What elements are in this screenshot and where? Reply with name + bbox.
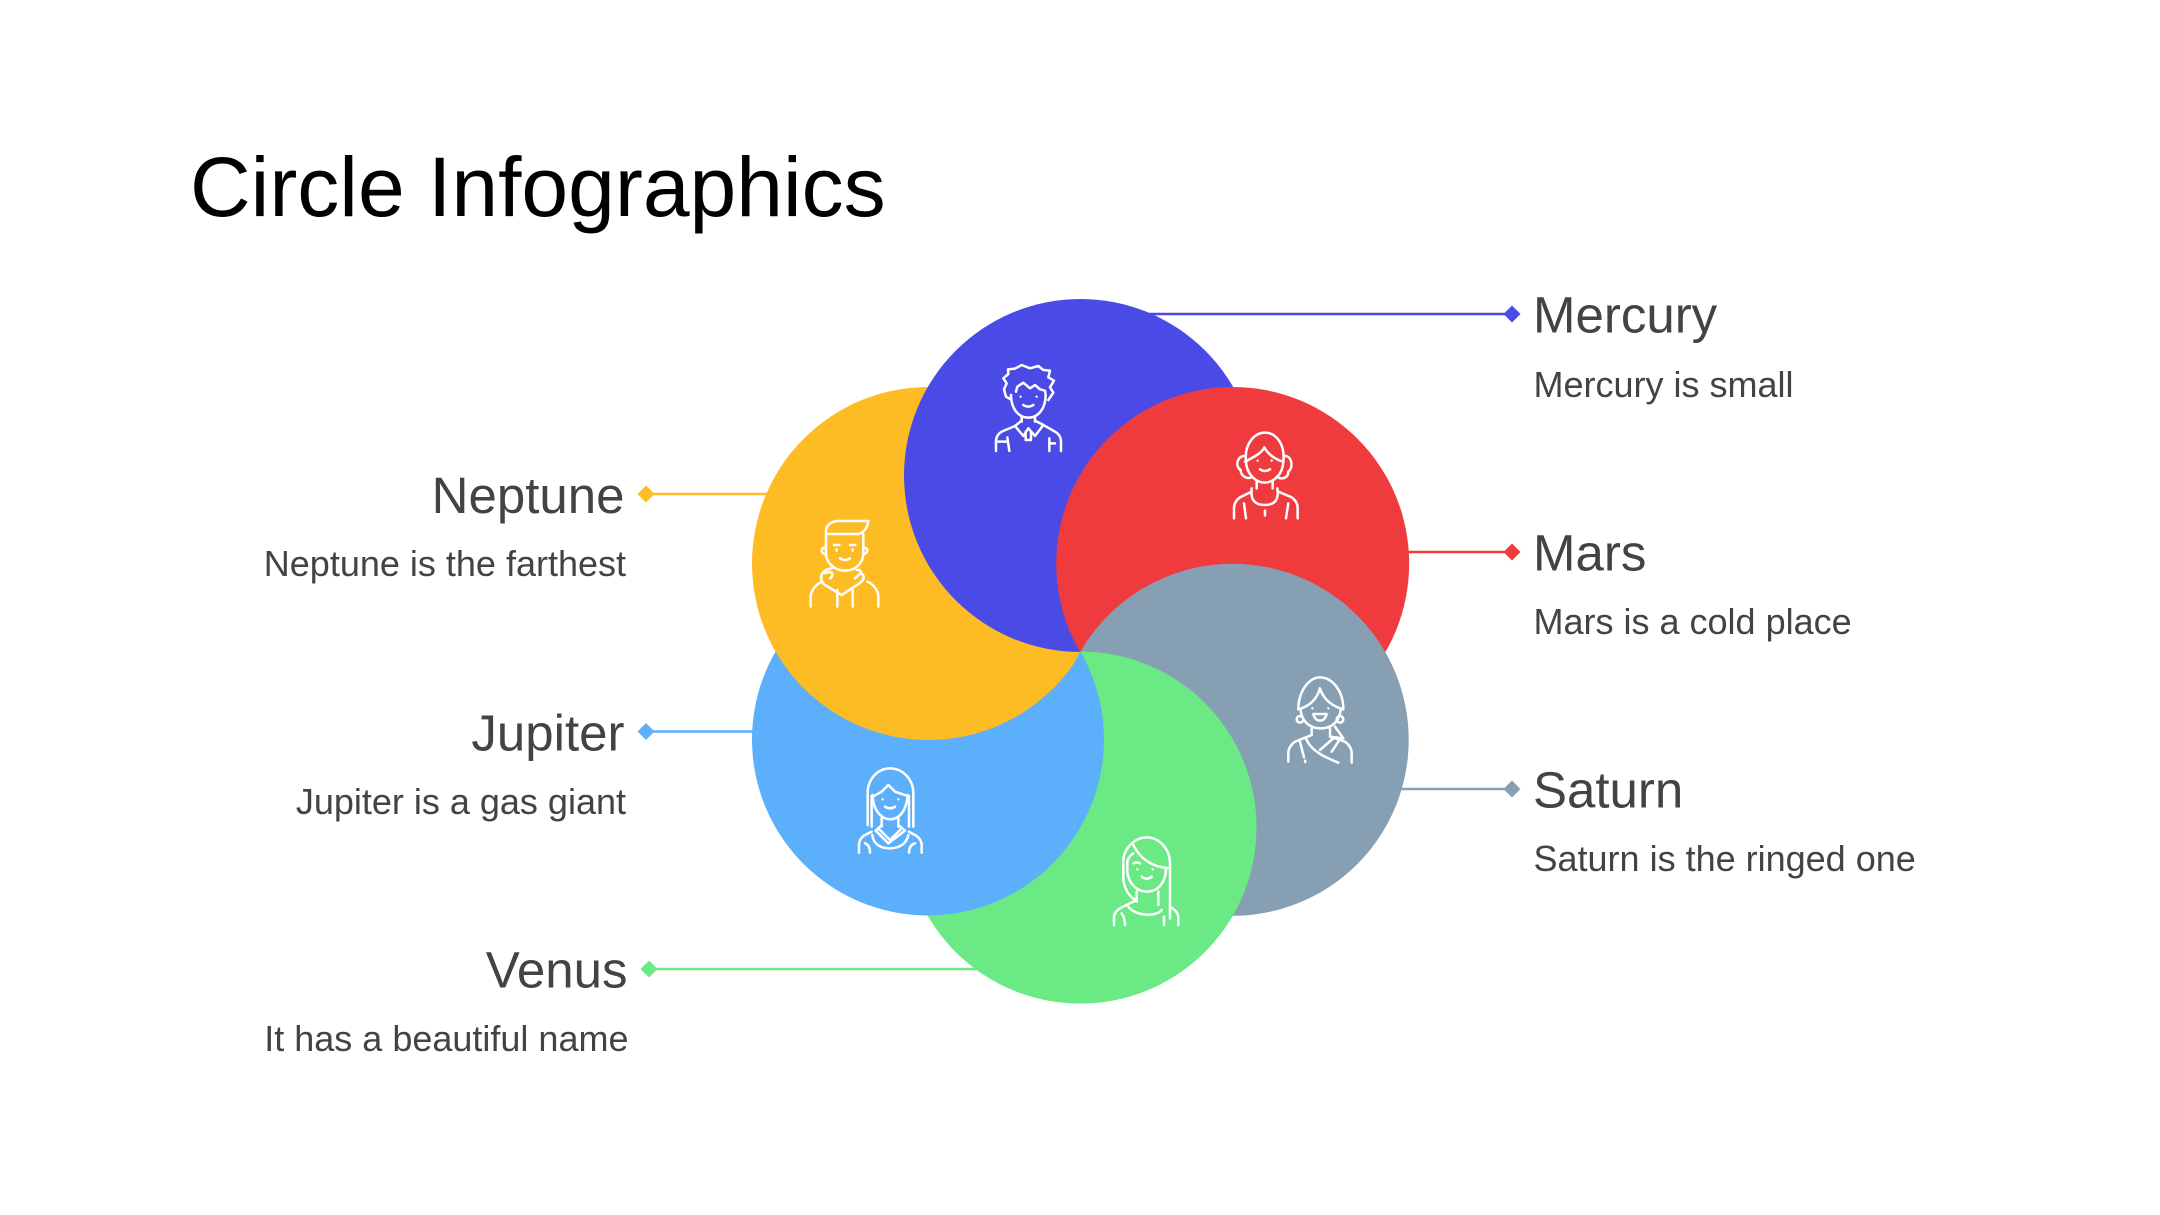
icon: Mars person bbox=[1234, 433, 1298, 518]
label: Saturn: Saturn is the ringed one bbox=[1534, 838, 1916, 879]
circle: Mars bbox=[1056, 387, 1409, 740]
circle: Jupiter lens above Saturn bbox=[1057, 652, 1104, 828]
icon: Mercury person bbox=[996, 365, 1061, 451]
label: Saturn: Saturn bbox=[1533, 762, 1683, 818]
label: Venus: Venus bbox=[486, 942, 628, 998]
label: Mercury: Mercury is small bbox=[1534, 364, 1794, 405]
icon: Jupiter person bbox=[859, 768, 922, 853]
label: Mercury bbox=[1130, 286, 1794, 405]
label: Neptune bbox=[264, 467, 780, 584]
icon: Venus person bbox=[1114, 837, 1178, 925]
circle: Venus bbox=[904, 652, 1256, 1004]
label: Mars: Mars bbox=[1533, 524, 1646, 582]
label: Jupiter: Jupiter is a gas giant bbox=[296, 781, 626, 822]
label: Neptune: Neptune bbox=[432, 467, 624, 524]
circle: Neptune bbox=[752, 387, 1105, 740]
title: Circle Infographics bbox=[190, 140, 886, 234]
icon: Saturn person bbox=[1288, 677, 1352, 763]
circle: Mercury bbox=[904, 299, 1257, 652]
label: Venus: It has a beautiful name bbox=[264, 1018, 628, 1059]
label: Venus bbox=[264, 942, 990, 1059]
label: Mars bbox=[1400, 524, 1852, 642]
label: Jupiter: Jupiter bbox=[471, 704, 625, 762]
label: Neptune: Neptune is the farthest bbox=[264, 543, 626, 584]
icon: Neptune person bbox=[811, 521, 878, 607]
circle: Jupiter bbox=[752, 564, 1104, 916]
circle: Venus crescent above Saturn and below Jupiter bbox=[928, 651, 1257, 1003]
label: Saturn bbox=[1390, 762, 1916, 879]
label: Jupiter bbox=[296, 704, 770, 822]
label: Mars: Mars is a cold place bbox=[1534, 601, 1852, 642]
circle: Saturn bbox=[1057, 564, 1409, 916]
label: Mercury: Mercury bbox=[1533, 286, 1718, 344]
